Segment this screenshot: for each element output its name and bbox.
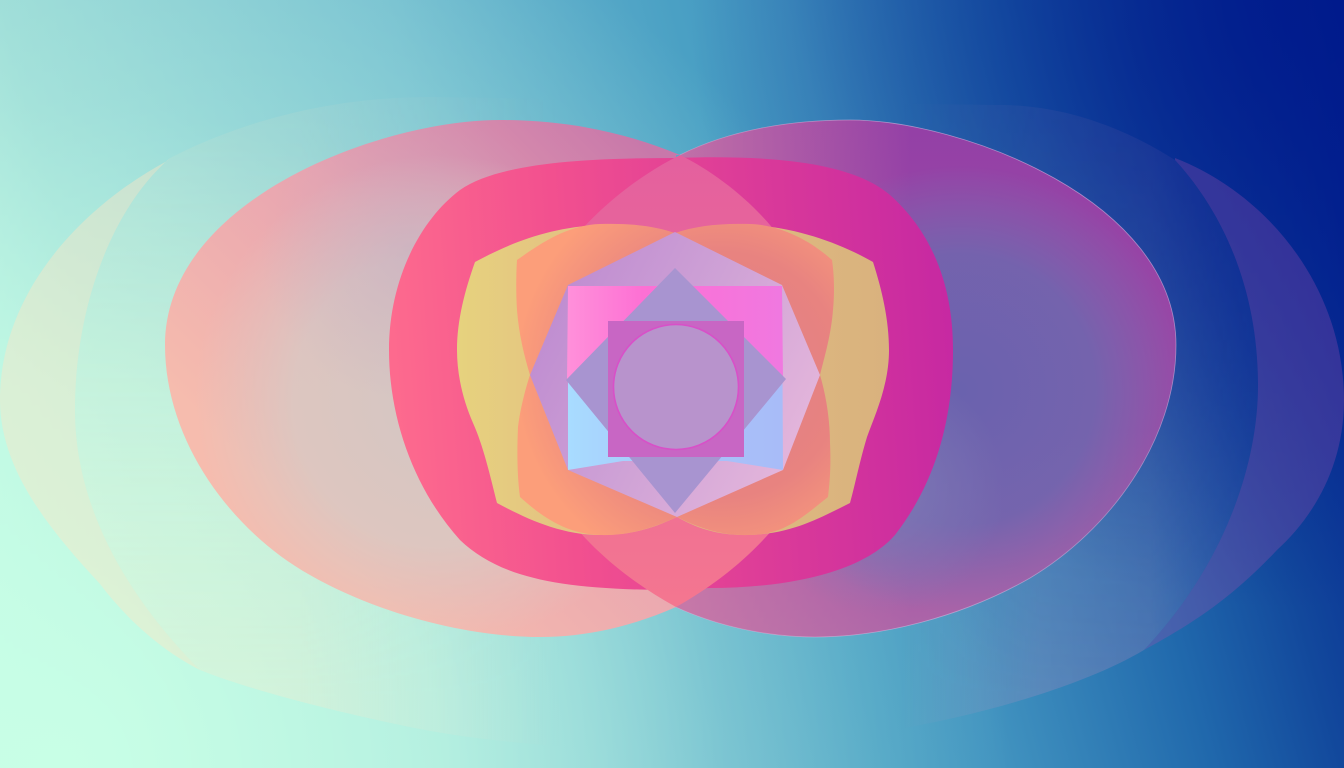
orange shape [516, 224, 834, 535]
yellow shape [457, 225, 889, 535]
rounded square [389, 157, 953, 590]
central circle [614, 324, 738, 450]
outer left crescent [0, 158, 200, 670]
left lobe [165, 120, 680, 637]
outer right crescent [1144, 158, 1344, 650]
pink and blue square [567, 286, 783, 470]
second translucent ellipse [75, 97, 1258, 750]
lilac octagon [530, 232, 820, 517]
violet diamond [566, 268, 786, 513]
right lobe [676, 120, 1176, 637]
magenta square [608, 321, 744, 457]
central lens [517, 155, 832, 607]
